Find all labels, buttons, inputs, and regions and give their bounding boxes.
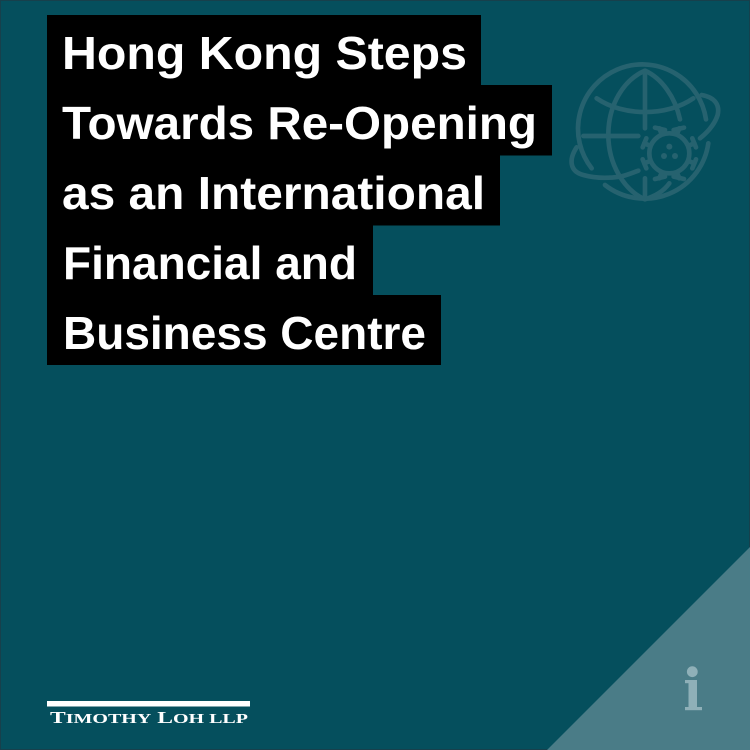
title line 3: as an International [62, 167, 485, 219]
title line 1 [47, 15, 481, 86]
icon: globe with virus [572, 64, 718, 199]
title line 5: Business Centre [63, 307, 426, 359]
title line 4 [47, 225, 373, 296]
title line 2: Towards Re-Opening [62, 97, 537, 149]
corner triangle [547, 547, 750, 750]
title line 3 [47, 155, 500, 226]
title line 5 [47, 295, 441, 365]
logo: Timothy Loh LLP [47, 701, 250, 727]
title line 2 [47, 85, 552, 156]
title [47, 15, 552, 365]
icon: info i [685, 666, 702, 710]
icon: virus [643, 128, 696, 179]
title line 4: Financial and [63, 237, 357, 289]
logo: Timothy Loh LLP: T IMOTHY L OH LLP [50, 708, 249, 727]
title line 1: Hong Kong Steps [62, 27, 467, 79]
